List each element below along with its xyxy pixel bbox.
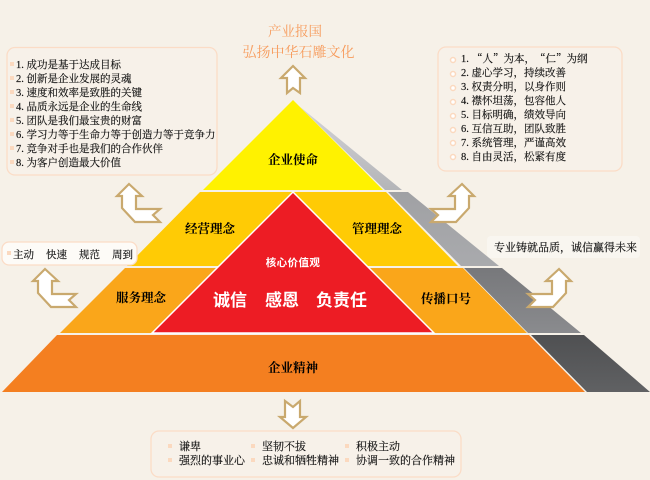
panel: enterprise spirit list: 强烈的事业心: [179, 453, 246, 467]
panel: right list: 5. 目标明确，绩效导向: [461, 108, 566, 121]
arrow: top up arrow: [281, 66, 305, 93]
title: [242, 23, 354, 61]
pyramid tier: 经营理念 and 管理理念: 管理理念: [352, 221, 403, 236]
panel: right list: 7. 系统管理，严谨高效: [461, 136, 566, 149]
arrow: left upper bent arrow: [117, 184, 160, 222]
panel: left list: 1. 成功是基于达成目标: [16, 58, 121, 71]
panel: left list: 4. 品质永远是企业的生命线: [16, 100, 142, 113]
title: 弘扬中华石雕文化: [242, 44, 354, 61]
panel: slogan: 专业铸就品质，诚信赢得未来: [494, 240, 637, 254]
panel: left list: 8. 为客户创造最大价值: [16, 156, 121, 169]
panel: enterprise spirit list: 协调一致的合作精神: [356, 453, 455, 467]
panel: left list: 6. 学习力等于生命力等于创造力等于竞争力: [16, 128, 216, 141]
pyramid core: 核心价值观: 感恩: [265, 290, 299, 310]
panel: enterprise spirit list: 积极主动: [356, 439, 400, 453]
arrow: right upper bent arrow: [431, 184, 474, 222]
pyramid tier: 服务理念 and 传播口号: [60, 268, 527, 333]
panel: right list: 4. 襟怀坦荡，包容他人: [461, 94, 566, 107]
panel: left list: 2. 创新是企业发展的灵魂: [16, 72, 132, 85]
panel: enterprise spirit list: 忠诚和牺牲精神: [262, 453, 339, 467]
panel: service keywords: [2, 242, 137, 265]
panel: right list: 2. 虚心学习，持续改善: [461, 66, 566, 79]
pyramid core: 核心价值观: 诚信: [213, 290, 247, 310]
arrow: bottom down arrow: [280, 401, 306, 428]
panel: right list: 8. 自由灵活，松紧有度: [461, 150, 566, 163]
panel: left list: 3. 速度和效率是致胜的关键: [16, 86, 142, 99]
pyramid tier: 经营理念 and 管理理念: 经营理念: [185, 221, 236, 236]
arrow: right lower bent arrow: [528, 269, 571, 307]
panel: service keywords: 快速: [46, 248, 67, 261]
panel: service keywords: 主动: [13, 248, 34, 261]
pyramid core: 核心价值观: [152, 192, 434, 333]
panel: left list: 7. 竞争对手也是我们的合作伙伴: [16, 142, 163, 155]
panel: service keywords: 周到: [112, 248, 133, 261]
pyramid tier: 企业精神: [2, 335, 585, 392]
pyramid tier: 企业精神: 企业精神: [268, 360, 318, 375]
pyramid tier: 企业使命: 企业使命: [268, 152, 318, 167]
title: 产业报国: [268, 23, 322, 39]
pyramid tier: 服务理念 and 传播口号: 服务理念: [116, 290, 167, 305]
panel: right list: 6. 互信互助，团队致胜: [461, 122, 566, 135]
panel: slogan: [487, 236, 640, 258]
panel: enterprise spirit list: 坚韧不拔: [262, 439, 306, 453]
panel: enterprise spirit list: 谦卑: [179, 439, 201, 453]
pyramid shadow side: [299, 106, 650, 392]
panel: right list: [438, 47, 622, 171]
pyramid core: 核心价值观: 负责任: [316, 291, 367, 310]
panel: enterprise spirit list: [151, 431, 461, 477]
panel: right list: 1.: [461, 54, 469, 65]
panel: right list: 3. 权责分明，以身作则: [461, 80, 566, 93]
arrow: left lower bent arrow: [33, 269, 76, 307]
panel: right list: “人”为本，“仁”为纲: [472, 51, 588, 66]
pyramid tier: 企业使命: [203, 100, 383, 190]
pyramid tier: 服务理念 and 传播口号: 传播口号: [421, 291, 471, 306]
panel: service keywords: 规范: [79, 248, 100, 261]
pyramid core: 核心价值观: 核心价值观: [266, 256, 320, 269]
panel: left list: [7, 48, 217, 175]
panel: left list: 5. 团队是我们最宝贵的财富: [16, 114, 142, 127]
pyramid tier: 经营理念 and 管理理念: [127, 192, 458, 266]
